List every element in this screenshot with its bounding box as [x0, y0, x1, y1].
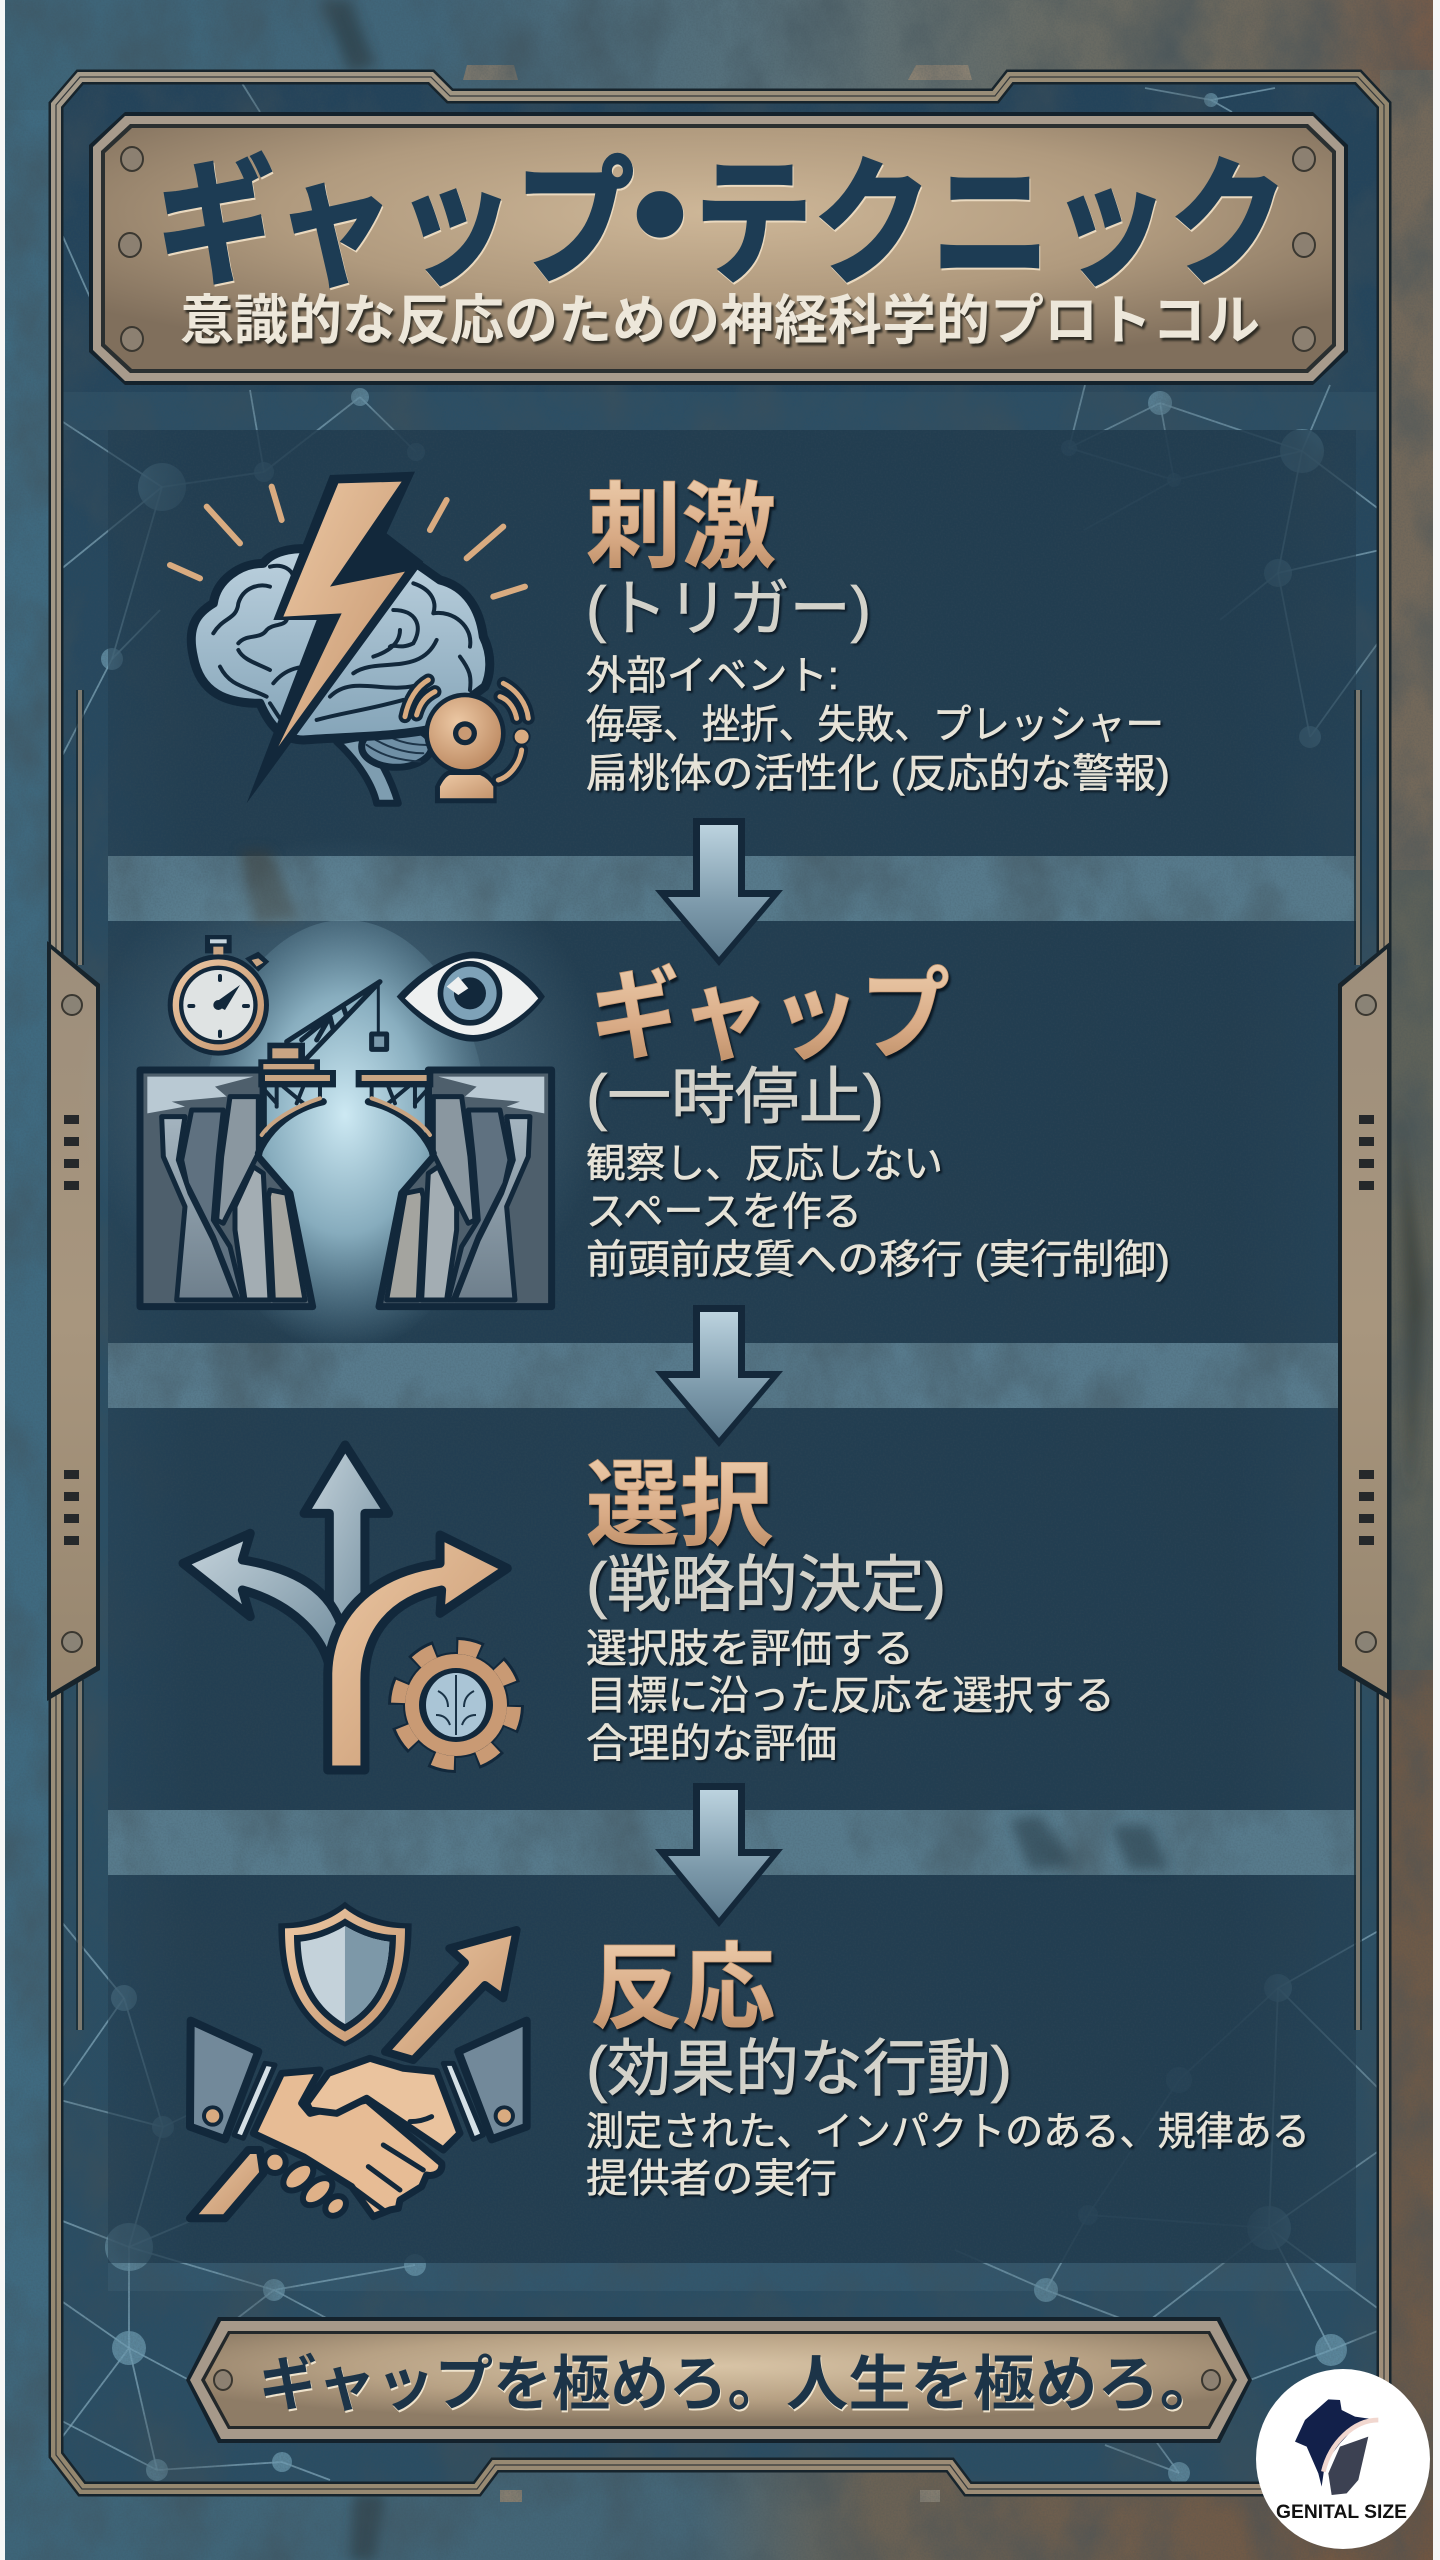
logo badge — [1256, 2369, 1430, 2549]
arrow: choice to response — [655, 1783, 783, 1927]
footer plaque — [186, 2317, 1252, 2443]
description: gap — [586, 1142, 1170, 1282]
description: choice: 合理的な評価 — [586, 1722, 837, 1766]
arrow: gap to choice — [655, 1305, 783, 1447]
side bracket right — [1338, 941, 1391, 1701]
main title: ギャップ — [156, 148, 634, 302]
description: stimulus: 外部イベント: — [586, 654, 839, 698]
subheading: strategic decision: (戦略的決定) — [586, 1551, 946, 1620]
description: response: 提供者の実行 — [586, 2157, 837, 2201]
description: gap: 前頭前皮質への移行 (実行制御) — [586, 1238, 1170, 1282]
icon: brain gear — [398, 1647, 514, 1763]
subheading: pause: (一時停止) — [586, 1063, 884, 1132]
subheading: effective action: (効果的な行動) — [586, 2035, 1012, 2104]
panel backgrounds — [108, 430, 1356, 2263]
heading: response: 反応 — [590, 1935, 775, 2040]
description: stimulus: 扁桃体の活性化 (反応的な警報) — [586, 752, 1170, 796]
connector bands — [60, 392, 1380, 2291]
main title — [156, 126, 1288, 316]
arrow: stimulus to gap — [655, 818, 783, 966]
description: choice — [586, 1627, 1115, 1766]
footer slogan: 人生を極めろ。 — [786, 2351, 1222, 2418]
description: gap: スペースを作る — [586, 1190, 862, 1234]
footer slogan: ギャップを極めろ。 — [259, 2351, 786, 2418]
subheading: trigger: (トリガー) — [586, 575, 871, 644]
title plaque — [89, 112, 1348, 385]
subtitle: 意識的な反応のための神経科学的プロトコル — [180, 291, 1260, 351]
description: stimulus: 侮辱、挫折、失敗、プレッシャー — [586, 703, 1164, 747]
main title: ・ — [575, 126, 745, 316]
description: choice: 目標に沿った反応を選択する — [586, 1674, 1115, 1718]
icon: shield, rising arrow and handshake — [190, 1902, 527, 2220]
description: stimulus — [586, 654, 1170, 796]
step 3: choice panel — [183, 1445, 1115, 1770]
description: response: 測定された、インパクトのある、規律ある — [586, 2110, 1310, 2154]
logo emblem — [1295, 2399, 1378, 2495]
description: gap: 観察し、反応しない — [586, 1142, 943, 1186]
description: response — [586, 2110, 1310, 2201]
side bracket left — [47, 941, 100, 1701]
step 2: gap panel — [77, 837, 1170, 1353]
heading: choice: 選択 — [586, 1452, 773, 1557]
icon: stopwatch, eye, crane and broken bridge — [77, 837, 610, 1353]
icon: branching arrows with brain gear — [183, 1445, 507, 1770]
description: choice: 選択肢を評価する — [586, 1627, 914, 1671]
icon: brain with lightning bolt and alarm — [170, 472, 530, 803]
plaque screws — [119, 147, 1315, 351]
logo wordmark: GENITAL SIZE — [1276, 2502, 1407, 2523]
main title: テクニック — [694, 148, 1288, 302]
heading: gap: ギャップ — [590, 960, 950, 1072]
step 4: response panel — [190, 1902, 1310, 2220]
heading: stimulus: 刺激 — [586, 474, 776, 579]
step 1: stimulus panel — [170, 472, 1170, 803]
footer slogan — [259, 2351, 1222, 2418]
